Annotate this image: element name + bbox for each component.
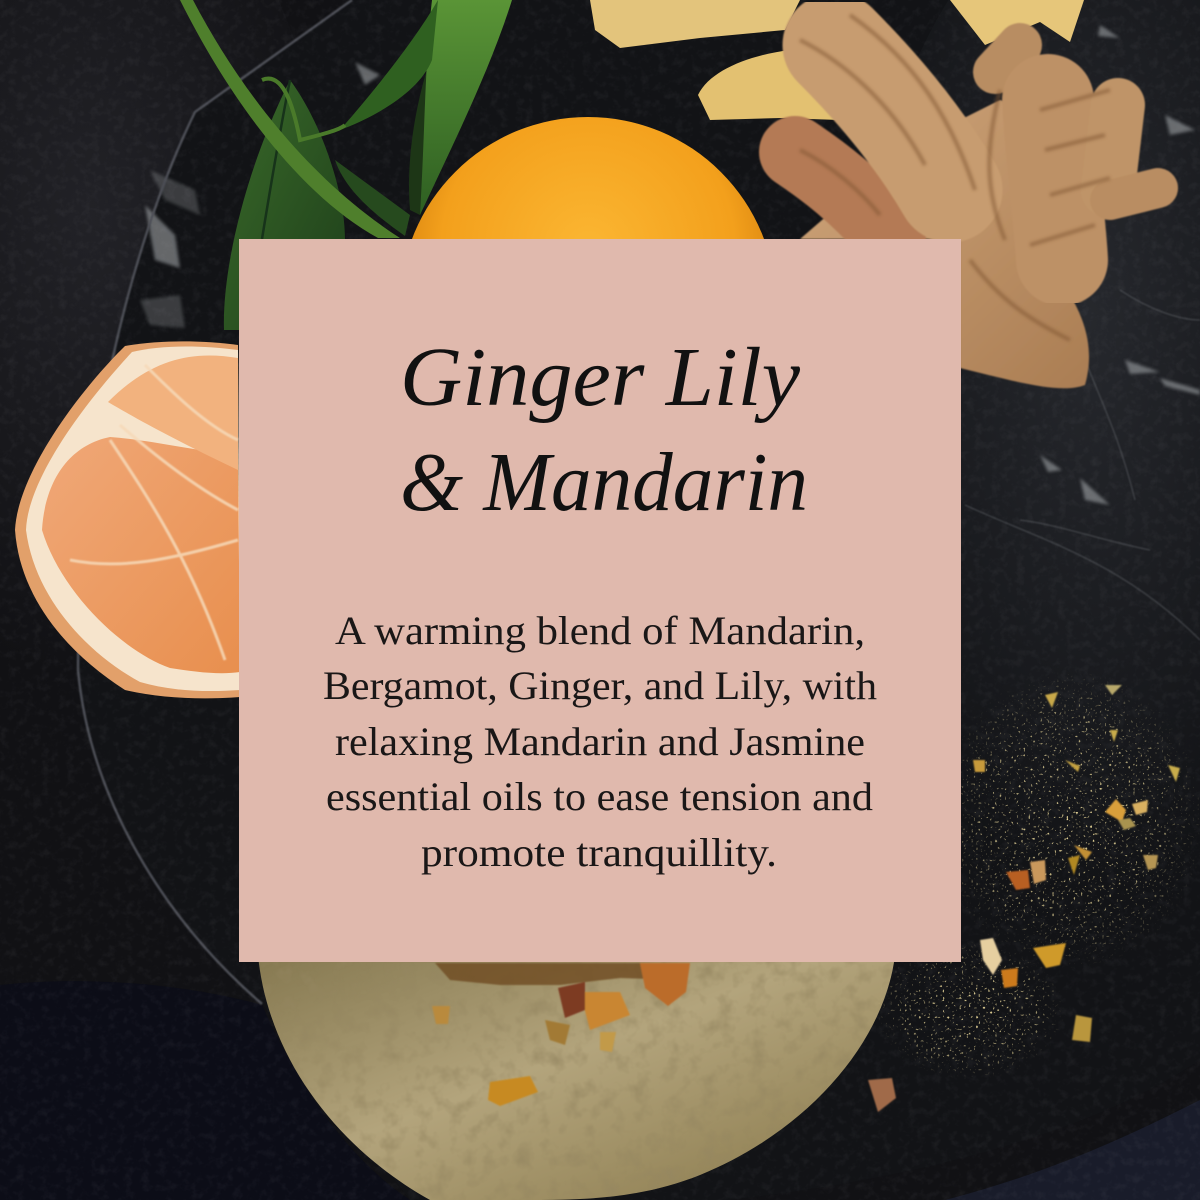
ginger root	[590, 0, 1158, 388]
upper knob	[995, 45, 1020, 72]
description text: Bergamot, Ginger, and Lily, with	[323, 663, 877, 708]
main finger	[835, 45, 950, 190]
description text: essential oils to ease tension and	[326, 774, 873, 819]
amber crystals	[868, 685, 1180, 1112]
marble white veins	[140, 25, 1200, 505]
navy fabric bottom right	[945, 1100, 1200, 1200]
title: line 1: Ginger Lily	[400, 331, 801, 424]
description text: relaxing Mandarin and Jasmine	[335, 719, 865, 764]
cut pale ginger slices	[590, 0, 800, 48]
title: line 2: & Mandarin	[400, 436, 808, 529]
scattered sand and resin crystals	[860, 650, 1200, 1112]
left reddish knob	[795, 152, 890, 235]
amber resin pieces on dish	[432, 963, 690, 1106]
description text: promote tranquillity.	[421, 830, 777, 875]
right finger	[1048, 100, 1062, 260]
navy fabric bottom left	[0, 981, 410, 1200]
leaves and stem	[180, 0, 512, 330]
text panel	[239, 239, 961, 962]
finger tip	[1108, 105, 1118, 190]
side spur	[1110, 188, 1158, 200]
description text: A warming blend of Mandarin,	[335, 608, 865, 653]
brass dish	[250, 950, 900, 1200]
mandarin segment	[15, 341, 240, 698]
description text	[323, 608, 877, 875]
ginger darker folds	[800, 15, 1110, 340]
ginger body fill joining the fingers	[800, 100, 1100, 388]
rim shine	[78, 0, 352, 1004]
orange	[400, 117, 776, 493]
